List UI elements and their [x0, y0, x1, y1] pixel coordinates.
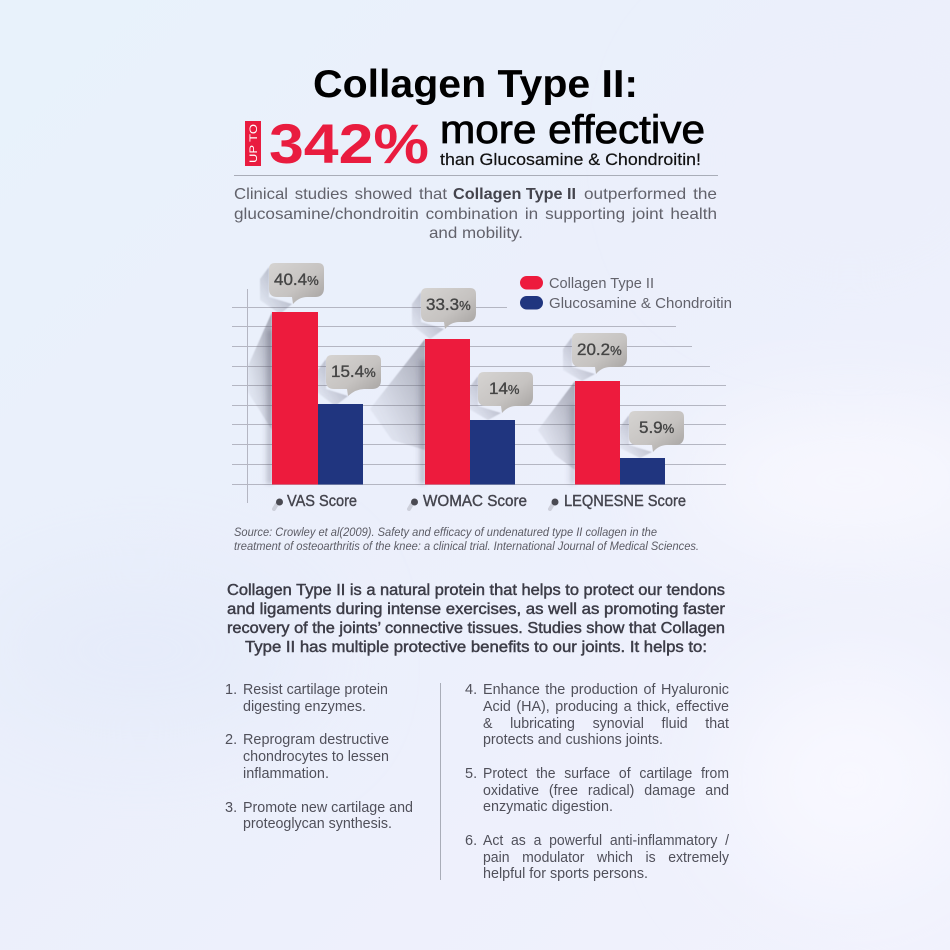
- item 2: chondrocytes to lessen: [243, 749, 389, 765]
- item 3: Promote new cartilage and: [243, 800, 413, 816]
- item 3: [225, 800, 413, 832]
- body paragraph: and ligaments during intense exercises, as well as promoting faster: [227, 601, 725, 618]
- callout: 5.9%: 5.9%: [639, 418, 675, 437]
- callout: 20.2%: [572, 333, 627, 374]
- item 2: 2.: [225, 732, 237, 748]
- callout: 33.3%: 33.3%: [426, 295, 471, 314]
- source note: [234, 527, 699, 553]
- item 5: [465, 766, 729, 815]
- callout: 15.4%: 15.4%: [331, 362, 376, 381]
- callout: 33.3%: [421, 288, 476, 329]
- intro paragraph: [234, 186, 717, 242]
- intro paragraph: and mobility.: [429, 225, 523, 242]
- legend: [520, 275, 732, 312]
- item 6: Act as a powerful anti-inflammatory /: [483, 833, 730, 849]
- item 1: digesting enzymes.: [243, 699, 366, 715]
- item 5: oxidative (free radical) damage and: [483, 783, 729, 799]
- item 6: pain modulator which is extremely: [483, 850, 730, 866]
- item 2: inflammation.: [243, 766, 329, 782]
- callout: 40.4%: [269, 263, 324, 304]
- callout: 5.9%: [629, 411, 684, 452]
- item 4: & lubricating synovial fluid that: [483, 716, 729, 732]
- body paragraph: recovery of the joints’ connective tissues. Studies show that Collagen: [227, 620, 725, 637]
- body paragraph: [227, 582, 725, 656]
- body paragraph: Collagen Type II is a natural protein that helps to protect our tendons: [227, 582, 725, 599]
- benefits list: right column: [465, 682, 730, 882]
- headline: up to 342% more effective: [245, 108, 705, 175]
- legend item: Collagen Type II: Collagen Type II: [549, 275, 654, 292]
- title: Collagen Type II:: [313, 63, 638, 106]
- item 5: Protect the surface of cartilage from: [483, 766, 729, 782]
- chart grid: [232, 289, 726, 503]
- badge: up to: [245, 121, 261, 166]
- item 4: [465, 682, 729, 748]
- callout: 14%: 14%: [489, 379, 520, 398]
- benefits list: left column: [225, 682, 413, 832]
- badge: up to: UP TO: [248, 123, 260, 163]
- source note: Source: Crowley et al(2009). Safety and efficacy of undenatured type II collagen in the: [234, 527, 657, 539]
- item 5: enzymatic digestion.: [483, 799, 613, 815]
- item 4: 4.: [465, 682, 477, 698]
- item 2: [225, 732, 389, 782]
- callout: 20.2%: 20.2%: [577, 340, 622, 359]
- axis label: VAS Score: VAS Score: [287, 493, 357, 510]
- source note: treatment of osteoarthritis of the knee: a clinical trial. International Journal of Medical Sciences.: [234, 541, 699, 553]
- subhead: comparison: than Glucosamine & Chondroitin!: [440, 150, 701, 169]
- group: WOMAC bars: [425, 339, 515, 484]
- group: LEQNESNE bars: [575, 381, 665, 484]
- item 4: Enhance the production of Hyaluronic: [483, 682, 729, 698]
- intro paragraph: outperformed the: [584, 186, 717, 203]
- callout: 40.4%: 40.4%: [274, 270, 319, 289]
- bar chart: [232, 263, 732, 510]
- item 1: Resist cartilage protein: [243, 682, 388, 698]
- callout: 15.4%: [326, 355, 381, 396]
- callout: 14%: [478, 372, 533, 413]
- item 4: Acid (HA), producing a thick, effective: [483, 699, 729, 715]
- item 2: Reprogram destructive: [243, 732, 389, 748]
- item 6: helpful for sports persons.: [483, 866, 648, 882]
- item 3: proteoglycan synthesis.: [243, 816, 392, 832]
- group: VAS bars: [272, 312, 363, 484]
- legend item: Glucosamine & Chondroitin: Glucosamine & Chondroitin: [549, 295, 732, 312]
- figure: 342%: 342%: [269, 112, 429, 175]
- intro paragraph: Collagen Type II: [453, 186, 576, 203]
- item 6: [465, 833, 730, 882]
- item 1: [225, 682, 388, 715]
- item 6: 6.: [465, 833, 477, 849]
- axis label: LEQNESNE Score: LEQNESNE Score: [564, 493, 686, 510]
- item 1: 1.: [225, 682, 237, 698]
- item 3: 3.: [225, 800, 237, 816]
- subhead: more effective: more effective: [440, 108, 705, 152]
- intro paragraph: Clinical studies showed that: [234, 186, 448, 203]
- body paragraph: Type II has multiple protective benefits to our joints. It helps to:: [245, 639, 707, 656]
- axis label: WOMAC Score: WOMAC Score: [423, 493, 527, 510]
- intro paragraph: glucosamine/chondroitin combination in supporting joint health: [234, 206, 717, 223]
- item 5: 5.: [465, 766, 477, 782]
- item 4: protects and cushions joints.: [483, 732, 663, 748]
